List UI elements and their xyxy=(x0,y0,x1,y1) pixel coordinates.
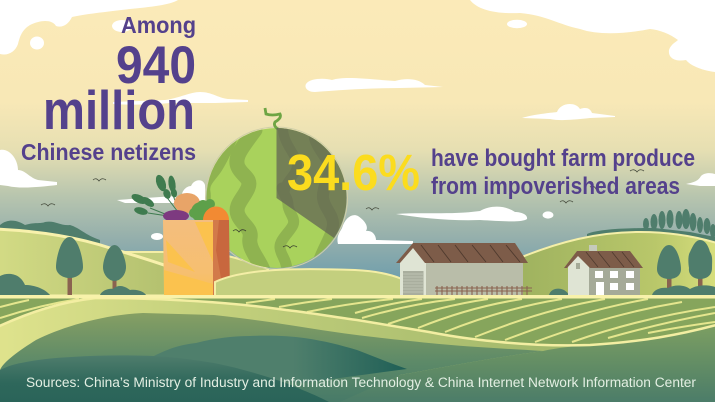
stem xyxy=(265,108,280,129)
watermelon xyxy=(204,108,348,270)
back hills left xyxy=(0,221,268,296)
birds xyxy=(41,179,602,210)
birds over text xyxy=(630,170,644,172)
field xyxy=(0,296,715,402)
shopping bag with vegetables xyxy=(130,173,230,295)
heading: Among 940 million Chinese netizens: Chinese netizens xyxy=(21,139,196,165)
statistic: 34.6%: 34.6% xyxy=(287,144,420,201)
farmhouse xyxy=(564,245,643,295)
pie slice 34.6% xyxy=(276,128,347,238)
ground line xyxy=(0,295,715,298)
right trees xyxy=(549,240,715,295)
sources: Sources: China’s Ministry of Industry and Information Technology & China Internet Network Information Center xyxy=(26,375,697,390)
left trees xyxy=(0,237,146,296)
text: have bought farm produce: from impoverished areas xyxy=(431,173,680,200)
barn xyxy=(396,243,532,295)
tree line xyxy=(643,209,715,238)
heading: Among 940 million Chinese netizens xyxy=(21,12,196,165)
birds over watermelon xyxy=(233,230,297,248)
heading: Among 940 million Chinese netizens: 940 xyxy=(116,36,196,95)
right hills xyxy=(215,228,715,297)
leaves xyxy=(130,173,179,216)
sky background xyxy=(0,0,715,300)
fence xyxy=(435,286,532,295)
foreground hills xyxy=(0,298,715,402)
clouds xyxy=(0,0,715,244)
text: have bought farm produce xyxy=(431,145,695,200)
heading: Among 940 million Chinese netizens: million xyxy=(43,79,195,141)
heading: Among 940 million Chinese netizens: Among xyxy=(121,12,196,38)
